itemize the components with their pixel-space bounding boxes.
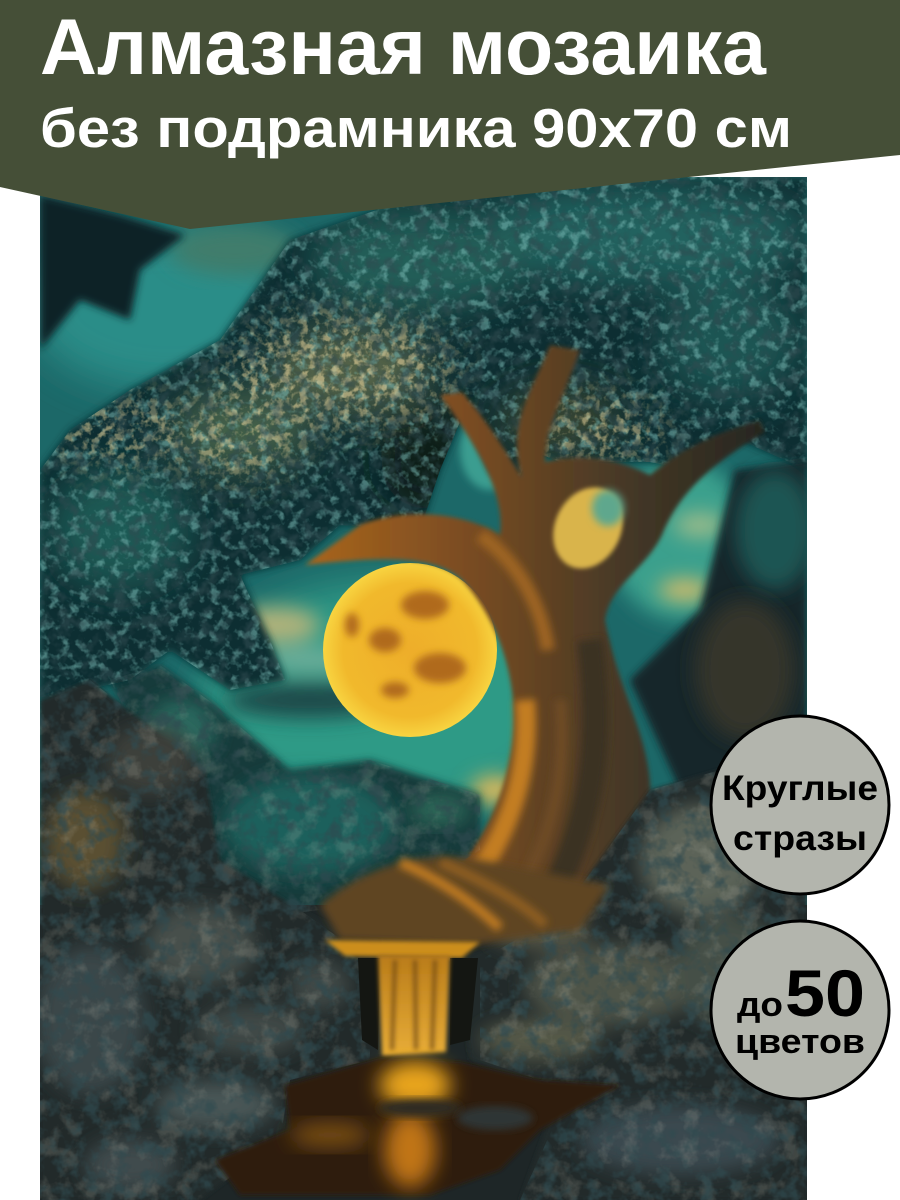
right rocks: [460, 770, 807, 1200]
tree canopy: [40, 177, 810, 700]
clouds: [225, 513, 726, 804]
header banner: [0, 0, 900, 229]
badge: up to 50 colours: 50: [785, 956, 865, 1030]
badge: up to 50 colours: цветов: [735, 1023, 865, 1061]
lower ground base: [40, 905, 807, 1200]
badge: round rhinestones: [711, 716, 889, 894]
painting: moonlit tree landscape: [30, 177, 815, 1200]
distant forest hills: [110, 665, 480, 920]
waterfall: [325, 940, 480, 1056]
badge: up to 50 colours: [711, 921, 889, 1099]
golden pool: [215, 1058, 620, 1195]
leaf texture: [40, 177, 807, 697]
title line 1: Алмазная мозаика: [40, 2, 767, 91]
right side foliage and cliff: [630, 460, 815, 790]
title line 2: без подрамника 90х70 см: [40, 97, 792, 159]
top-left branch silhouette: [40, 195, 185, 350]
moon: [323, 563, 497, 737]
sky background: [40, 177, 807, 905]
tree roots: [320, 857, 610, 945]
badge: round rhinestones: Круглые: [722, 769, 878, 808]
badge: round rhinestones: стразы: [733, 819, 867, 858]
left rocks: [40, 679, 357, 1200]
badge: up to 50 colours: до: [737, 986, 783, 1024]
rock shading texture: [40, 665, 807, 1200]
tree trunk and branches: [305, 345, 765, 935]
sky hole in trunk: [550, 484, 629, 572]
bark highlights: [465, 535, 595, 890]
